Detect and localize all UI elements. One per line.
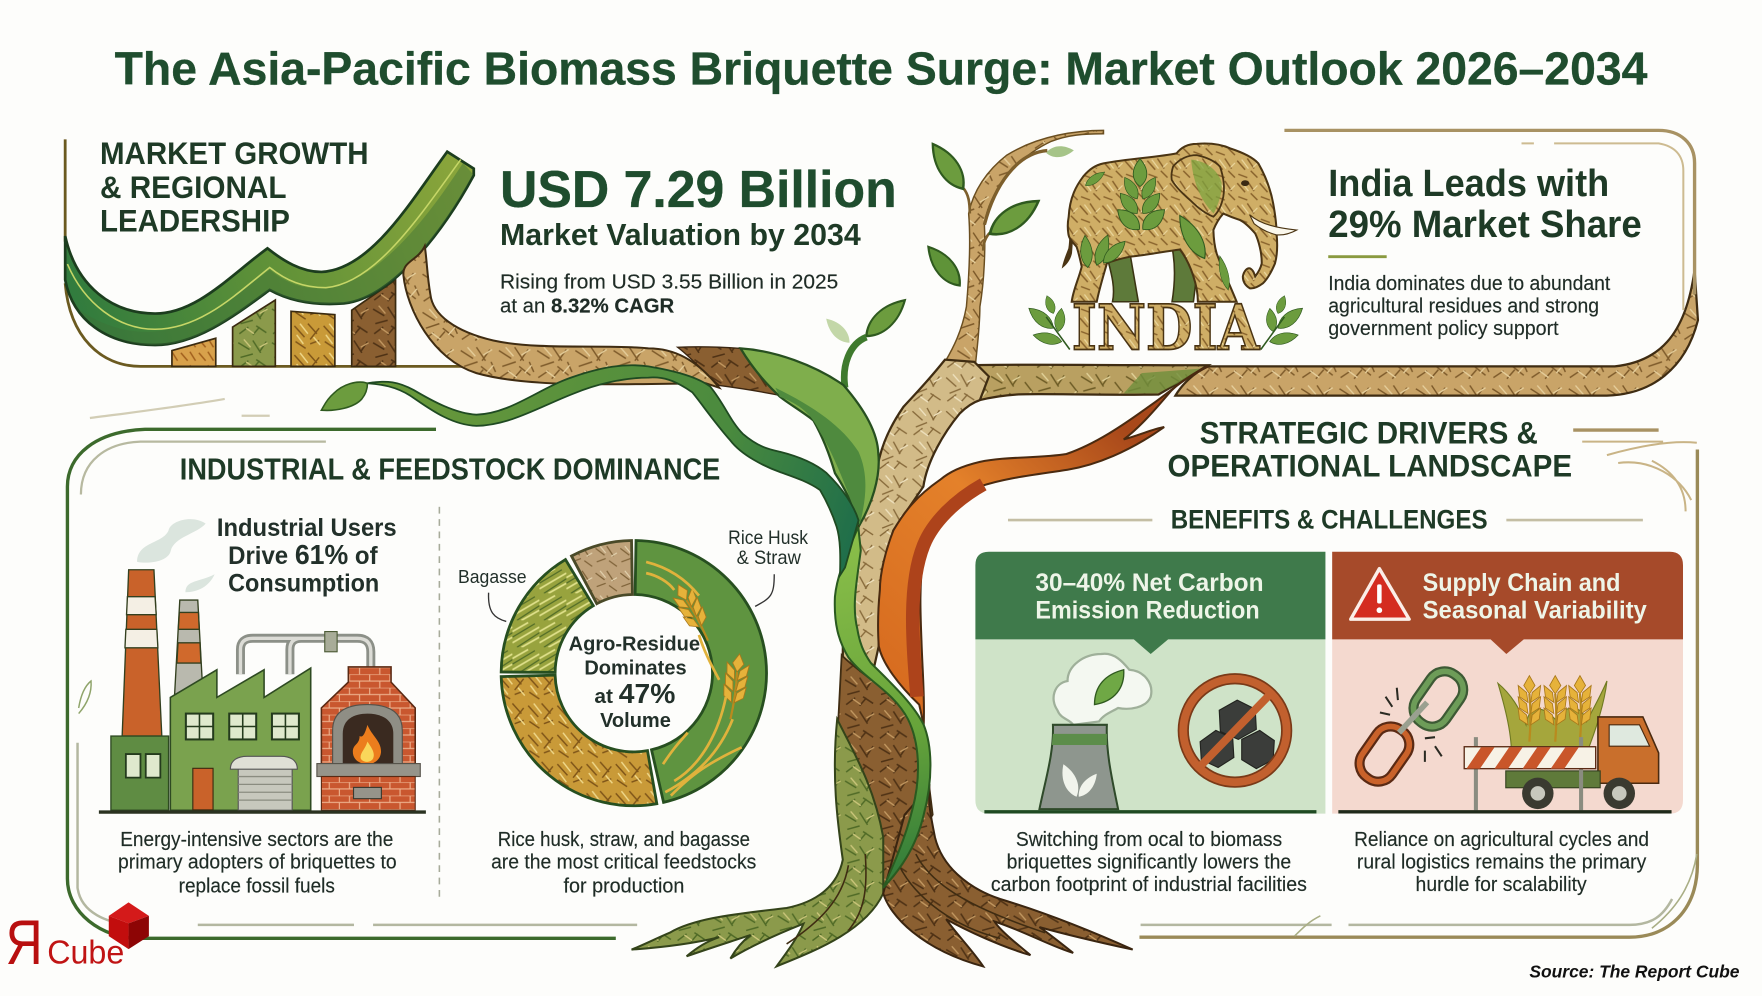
icon: warning triangle [1351,569,1409,619]
caption: switching from coal: carbon footprint of industrial facilities [991,873,1307,896]
growth arrow [65,152,474,345]
caption: energy-intensive sectors: primary adopters of briquettes to [118,851,397,874]
market valuation text block [500,160,897,317]
chart: feedstock donut [501,541,767,806]
subheading: benefits and challenges: BENEFITS & CHALLENGES [1171,504,1488,534]
text: industrial users: Industrial Users [217,514,397,542]
right root [883,787,1133,966]
panel frame: industrial and feedstock [67,399,637,938]
logo: RCube: Я [6,908,43,978]
icon: factory with chimneys and kiln [99,519,426,812]
text: industrial users: Consumption [228,570,379,598]
heading: market growth: & REGIONAL [100,170,287,205]
chimney two [174,600,203,702]
green vine [367,365,859,575]
upper-left green ribbon [741,348,879,525]
caption: energy-intensive sectors [118,828,397,897]
panel frame: india [1284,130,1695,310]
factory main [170,668,311,810]
heading: market growth: LEADERSHIP [100,204,290,239]
logo: RCube: Cube [47,934,124,972]
text: india leads: agricultural residues and strong [1328,294,1599,317]
heading: market growth: MARKET GROWTH [100,136,369,171]
caption: energy-intensive sectors: Energy-intensive sectors are the [120,828,393,851]
caption: rice husk feedstocks: are the most critical feedstocks [491,851,756,874]
steam [137,519,215,592]
market valuation text block: USD 7.29 Billion [500,160,897,218]
caption: reliance on agricultural cycles: Reliance on agricultural cycles and [1354,828,1649,851]
pipes [240,638,371,674]
heading: strategic drivers [1168,415,1572,483]
india wordmark: INDIA [1072,290,1260,364]
caption: switching from coal [991,828,1307,896]
right branch [916,362,1208,425]
donut center label: Dominates [584,657,687,680]
benefit heading text: 30–40% Net Carbon [1035,569,1264,597]
heading: industrial and feedstock: INDUSTRIAL & FEEDSTOCK DOMINANCE [180,454,720,487]
brick kiln [321,667,415,764]
text: india leads: India Leads with [1328,162,1609,205]
icon: smoke cloud with leaf [1054,654,1151,725]
upper stem [945,130,1103,365]
caption: switching from coal: Switching from ocal to biomass [1016,828,1282,851]
text: india leads [1328,162,1642,340]
challenge heading text: Seasonal Variability [1423,596,1647,624]
segment: bagasse [501,560,593,672]
root strand lines [787,854,1045,944]
trunk tan [843,360,989,697]
icon: truck with crops and barrier [1464,676,1659,810]
segment: other residue [572,541,632,604]
chimney one [122,570,162,736]
heading: strategic drivers: STRATEGIC DRIVERS & [1200,415,1538,450]
chart axes [65,139,478,366]
segment: agro residue [501,675,657,806]
market valuation text block: Rising from USD 3.55 Billion in 2025 [500,270,838,293]
elephant ear [1171,155,1224,217]
caption: rice husk feedstocks: for production [564,874,684,897]
benefit header [975,552,1325,654]
text: india leads: 29% Market Share [1328,203,1642,246]
heading: market growth [100,136,369,239]
panel: benefit carbon reduction [975,552,1325,814]
benefit body [975,639,1325,814]
text: industrial users [217,514,397,598]
caption: rice husk feedstocks: Rice husk, straw, and bagasse [498,828,750,851]
caption: reliance on agricultural cycles: hurdle for scalability [1416,873,1587,896]
laurel leaves [1025,294,1306,347]
text: industrial users: Drive 61% of [228,539,378,570]
elephant eye [1241,180,1249,186]
caption: switching from coal: briquettes significantly lowers the [1007,851,1291,874]
benefit heading text [1035,569,1264,624]
source note: Source: The Report Cube [1529,961,1740,981]
green tint on branch [1124,369,1200,393]
title: The Asia-Pacific Biomass Briquette Surge: Market Outlook 2026–2034 [115,42,1648,94]
divider: dashed [438,507,440,899]
donut center label [569,633,700,732]
sprout stem [844,337,866,388]
logo: RCube [6,902,149,978]
market valuation text block: at an 8.32% CAGR [500,294,674,317]
factory left block [111,736,169,810]
benefit heading text: Emission Reduction [1035,596,1260,624]
market valuation text block: Market Valuation by 2034 [500,219,861,252]
tree: central biomass tree [321,130,1698,966]
panel: challenge supply chain [1332,552,1683,814]
elephant tail [1062,220,1073,269]
icon: broken chain [1353,665,1470,788]
left root [632,719,883,966]
caption: reliance on agricultural cycles: rural logistics remains the primary [1357,851,1647,874]
orange branch [878,366,1208,725]
benefit ground line [984,810,1316,813]
vine leaf [321,382,367,410]
segment: rice husk and straw [635,541,767,802]
panel frame: strategic drivers [1139,430,1697,937]
callout: rice husk and straw [728,528,808,606]
bright green twist [835,527,930,888]
icon: cooling tower [1039,725,1118,809]
icon: india elephant [1025,144,1306,364]
challenge ground line [1338,810,1672,813]
text: india leads: government policy support [1328,317,1559,340]
challenge header [1332,552,1683,654]
caption: energy-intensive sectors: replace fossil fuels [179,874,335,897]
laurel stems [1046,317,1284,349]
callout: rice husk and straw: Rice Husk [728,528,808,549]
heading: strategic drivers: OPERATIONAL LANDSCAPE [1168,448,1572,483]
twig with pale leaf [984,151,1047,225]
india branch band [1175,270,1698,396]
elephant tusk [1250,215,1297,235]
callout: bagasse: Bagasse [458,566,527,587]
callout: rice husk and straw: & Straw [737,548,801,569]
text: india leads: India dominates due to abundant [1328,272,1611,295]
challenge body [1332,639,1683,814]
panel: market growth and regional leadership [65,136,478,366]
chip branch to bar chart [403,246,719,388]
ground line [99,811,426,814]
barrier [1476,737,1581,810]
donut center label: Volume [600,709,671,732]
upper-left brown ribbon [678,347,781,396]
leaves on stem [822,139,1074,347]
elephant far legs [1107,247,1200,302]
elephant body [1068,144,1277,302]
challenge heading text: Supply Chain and [1423,569,1620,597]
caption: rice husk feedstocks [491,828,756,897]
icon: no coal [1183,679,1287,782]
caption: reliance on agricultural cycles [1354,828,1649,896]
donut center label: at 47% [594,678,675,709]
leaf branches [963,188,990,251]
lower brown core [837,655,933,893]
elephant leaf motif [1079,159,1232,291]
bar chart: biomass bars [172,280,396,366]
callout: bagasse [458,566,527,621]
challenge heading text [1423,569,1647,624]
donut center label: Agro-Residue [569,633,700,656]
